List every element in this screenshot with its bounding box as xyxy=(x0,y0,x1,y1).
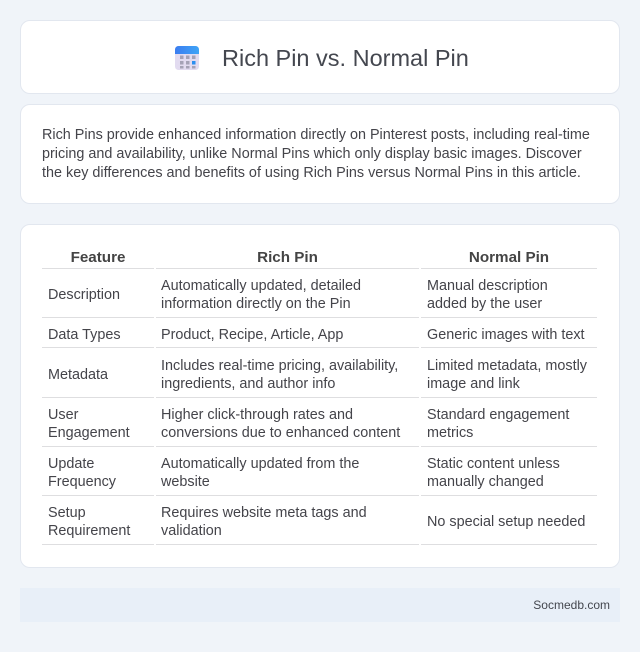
row: setup requirement: No special setup needed xyxy=(427,514,585,530)
row: data types: Data Types xyxy=(48,327,121,343)
table header: Normal Pin xyxy=(469,249,549,266)
row: setup requirement: Setup xyxy=(48,505,86,521)
table header xyxy=(71,249,549,266)
row: setup requirement: Requires website meta tags and xyxy=(161,505,367,521)
row: description: Manual description xyxy=(427,278,548,294)
row: data types: Product, Recipe, Article, App xyxy=(161,327,343,343)
row: data types xyxy=(48,327,585,343)
intro text: Rich Pins provide enhanced information directly on Pinterest posts, including real-time xyxy=(42,127,590,143)
row: update frequency: Frequency xyxy=(48,474,116,490)
row: description xyxy=(48,278,548,312)
row: update frequency xyxy=(48,456,560,490)
title: Rich Pin vs. Normal Pin xyxy=(222,45,469,71)
row: metadata: ingredients, and author info xyxy=(161,376,335,392)
row: update frequency: manually changed xyxy=(427,474,544,490)
row: update frequency: website xyxy=(161,474,210,490)
row: description: Automatically updated, detailed xyxy=(161,278,361,294)
intro card xyxy=(20,104,620,204)
row: description: Description xyxy=(48,287,120,303)
row: setup requirement: validation xyxy=(161,523,222,539)
table card xyxy=(20,224,620,568)
row: user engagement: Higher click-through rates and xyxy=(161,407,353,423)
intro text: pricing and availability, unlike Normal Pins which only display basic images. Discover xyxy=(42,146,582,162)
row: metadata: Includes real-time pricing, availability, xyxy=(161,358,398,374)
row: update frequency: Automatically updated from the xyxy=(161,456,359,472)
row: user engagement: User xyxy=(48,407,78,423)
row: setup requirement xyxy=(48,505,585,539)
row: data types: Generic images with text xyxy=(427,327,585,343)
row: user engagement: Standard engagement xyxy=(427,407,569,423)
row: metadata: Metadata xyxy=(48,367,108,383)
row: description: added by the user xyxy=(427,296,542,312)
table header: Rich Pin xyxy=(257,249,318,266)
row: user engagement xyxy=(48,407,570,441)
table header: Feature xyxy=(71,249,125,266)
row: metadata: Limited metadata, mostly xyxy=(427,358,587,374)
row: metadata: image and link xyxy=(427,376,520,392)
row: user engagement: metrics xyxy=(427,425,473,441)
row: user engagement: conversions due to enhanced content xyxy=(161,425,400,441)
title card xyxy=(20,20,620,94)
row: description: information directly on the Pin xyxy=(161,296,351,312)
row: setup requirement: Requirement xyxy=(48,523,130,539)
footer source: Socmedb.com xyxy=(533,598,610,612)
icon: calendar xyxy=(175,46,199,70)
footer bar xyxy=(20,588,620,622)
row: update frequency: Static content unless xyxy=(427,456,560,472)
row: metadata xyxy=(48,358,587,392)
row: update frequency: Update xyxy=(48,456,94,472)
intro text: the key differences and benefits of using Rich Pins versus Normal Pins in this article. xyxy=(42,165,581,181)
row: user engagement: Engagement xyxy=(48,425,130,441)
intro text xyxy=(42,127,590,181)
